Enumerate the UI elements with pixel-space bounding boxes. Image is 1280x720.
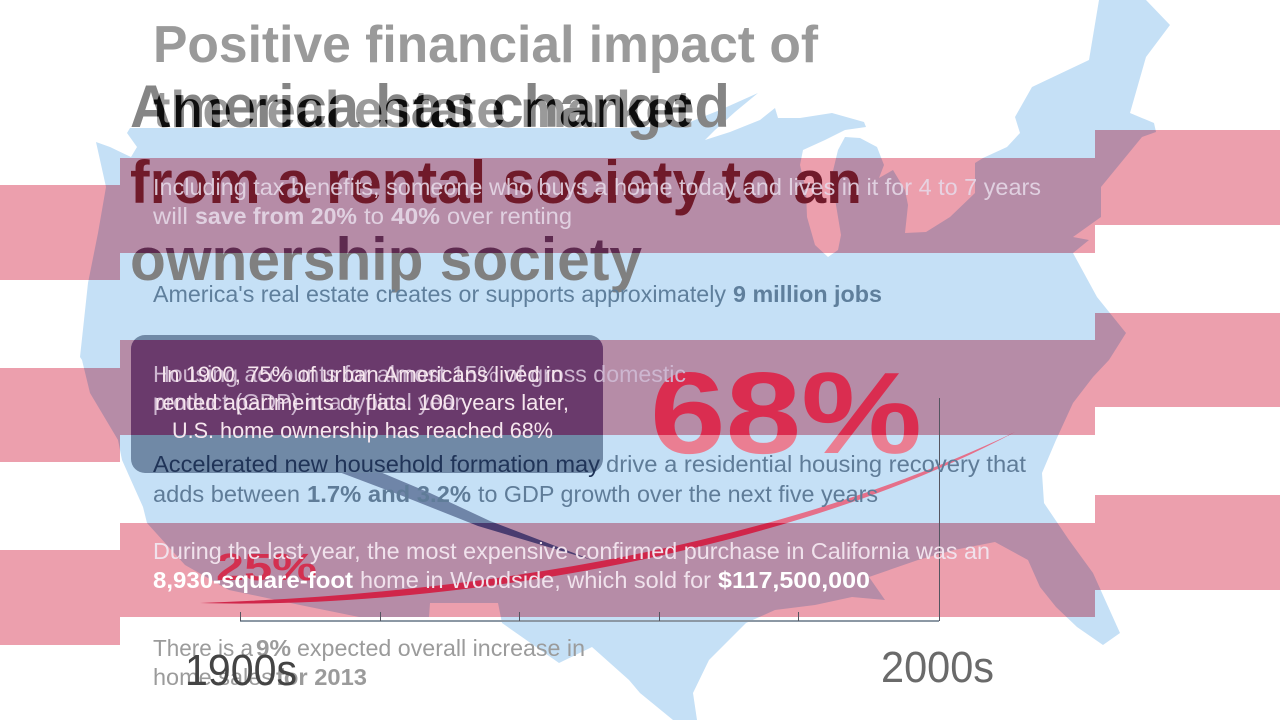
fact: GDP share: Housing accounts for almost 15% of gross domestic — [153, 361, 686, 387]
panel text: U.S. home ownership has reached 68% — [172, 418, 553, 443]
heading: America has changed — [130, 73, 862, 293]
fact: tax benefits: Including tax benefits, someone who buys a home today and lives in it for 4 to 7 years — [153, 174, 1041, 200]
fact: most expensive purchase: home in Woodside, which sold for — [360, 567, 711, 593]
fact: tax benefits: will — [152, 203, 188, 229]
fact: home sales: There is a — [153, 635, 253, 661]
fact: household formation: drive a residential housing recovery that — [606, 451, 1027, 477]
growth curve — [200, 432, 1015, 604]
fact: tax benefits: to — [364, 203, 384, 229]
fact: jobs: 9 million jobs — [733, 281, 882, 307]
panel text: rented apartments or flats. 100 years later, — [155, 390, 569, 415]
fact: household formation: 1.7% and 3.2% — [307, 481, 471, 507]
fact: home sales: home sales — [153, 664, 273, 690]
chart pointer wedge — [339, 472, 592, 560]
fact: home sales — [153, 635, 585, 690]
fact: household formation: to GDP growth over the next five years — [478, 481, 878, 507]
fact: home sales: 9% — [256, 635, 291, 661]
fact: most expensive purchase: $117,500,000 — [718, 567, 870, 593]
heading: positive financial impact — [153, 16, 819, 139]
fact: household formation: adds between — [153, 481, 300, 507]
fact: tax benefits: over renting — [447, 203, 572, 229]
fact: GDP share: product (GDP) in a typical year — [153, 389, 462, 415]
heading: positive financial impact: Positive financial impact of — [153, 16, 819, 74]
chart vertical axis — [938, 398, 940, 621]
fact: tax benefits: save from 20% — [195, 203, 357, 229]
fact: most expensive purchase: 8,930-square-foot — [153, 567, 353, 593]
fact: household formation — [153, 451, 1027, 507]
fact: most expensive purchase — [153, 538, 990, 593]
axis label: 1900s: 1900s — [185, 646, 297, 695]
fact: home sales: expected overall increase in — [297, 635, 585, 661]
chart ticks — [240, 612, 798, 621]
panel text — [155, 362, 569, 443]
fact: most expensive purchase: During the last year, the most expensive confirmed purchase in California was an — [153, 538, 990, 564]
flag stripes — [0, 130, 1280, 645]
heading: America has changed: America has changed — [130, 73, 730, 140]
fact: GDP share — [153, 361, 686, 415]
callout panel — [131, 335, 603, 473]
fact: tax benefits — [152, 174, 1041, 229]
fact: jobs: America's real estate creates or supports approximately — [153, 281, 727, 307]
big figure: 68%: 68% — [650, 348, 922, 478]
heading: America has changed: America has changed — [130, 73, 730, 140]
chart — [240, 398, 940, 621]
heading: America has changed: ownership society — [130, 226, 643, 293]
fact: tax benefits: 40% — [391, 203, 440, 229]
body text: financial facts — [152, 174, 1041, 690]
fact: home sales: for 2013 — [276, 664, 367, 690]
big figure: 25%: 25% — [216, 547, 317, 589]
heading: positive financial impact: the real estate market — [153, 81, 692, 139]
axis label: 2000s: 2000s — [881, 643, 994, 692]
fact: household formation: Accelerated new household formation may — [153, 451, 601, 477]
chart axes — [240, 620, 939, 622]
panel text: In 1900, 75% of urban Americans lived in — [161, 362, 563, 387]
heading: America has changed: from a rental society to an — [130, 149, 862, 216]
